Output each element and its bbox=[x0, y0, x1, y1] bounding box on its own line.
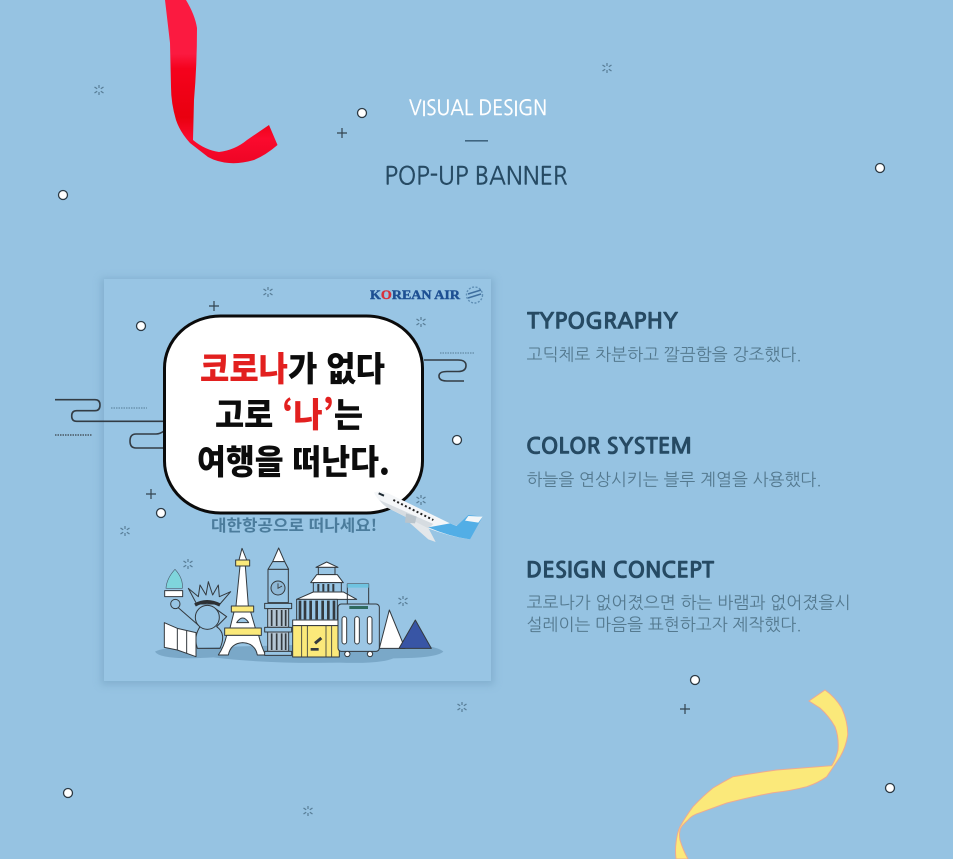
yellow ribbon bbox=[676, 690, 848, 859]
title divider bbox=[465, 140, 488, 142]
title bbox=[384, 98, 568, 188]
icon: blue mountain bbox=[399, 620, 431, 648]
bubble headline line 3: 여행을 떠난다. bbox=[197, 435, 390, 484]
red ribbon bbox=[165, 0, 278, 163]
icon: folded map bbox=[164, 623, 196, 657]
banner plus signs bbox=[146, 301, 219, 499]
banner subtitle: 대한항공으로 떠나세요! bbox=[211, 512, 377, 536]
icon: statue of liberty bbox=[165, 569, 231, 648]
banner background bbox=[104, 279, 491, 681]
speech bubble bbox=[164, 316, 422, 513]
landmarks illustration bbox=[155, 548, 443, 663]
icon: eiffel tower bbox=[218, 548, 266, 655]
korean air logo: KOREAN AIR bbox=[370, 287, 461, 302]
title: visual design: VISUAL DESIGN bbox=[409, 98, 547, 119]
cloud line right bbox=[424, 353, 475, 381]
panel: pop-up banner bbox=[55, 278, 494, 685]
banner sparkles bbox=[120, 287, 426, 606]
decorative sparkles bbox=[94, 63, 612, 816]
text block: color system bbox=[526, 436, 822, 488]
body: typography: 고딕체로 차분하고 깔끔함을 강조했다. bbox=[526, 346, 802, 364]
heading: typography: TYPOGRAPHY bbox=[527, 310, 678, 332]
ground shadow bbox=[155, 643, 443, 663]
decorative plus signs bbox=[337, 128, 690, 714]
bubble headline line 1: 코로나가 없다 bbox=[200, 342, 385, 391]
icon: big ben bbox=[265, 548, 292, 655]
cloud line left bbox=[55, 400, 164, 448]
bubble headline line 2: 고로 ‘나’는 bbox=[215, 388, 363, 437]
icon: domed building bbox=[293, 562, 357, 657]
body: color system: 하늘을 연상시키는 블루 계열을 사용했다. bbox=[526, 470, 822, 488]
text block: typography bbox=[526, 310, 802, 364]
icon: suitcase bbox=[338, 584, 379, 657]
icon: white mountain bbox=[379, 610, 405, 648]
body: design concept line 1: 코로나가 없어졌으면 하는 바램과 없어졌을시 bbox=[526, 594, 850, 612]
decorative circles bbox=[58, 108, 894, 798]
title: pop-up banner: POP-UP BANNER bbox=[384, 164, 568, 188]
banner circles bbox=[136, 322, 462, 518]
heading: design concept: DESIGN CONCEPT bbox=[526, 560, 714, 582]
icon: airplane bbox=[374, 491, 483, 542]
text block: design concept bbox=[526, 560, 850, 634]
banner shadow bbox=[101, 278, 494, 685]
heading: color system: COLOR SYSTEM bbox=[526, 436, 692, 458]
body: design concept line 2: 설레이는 마음을 표현하고자 제작했다. bbox=[526, 616, 802, 634]
